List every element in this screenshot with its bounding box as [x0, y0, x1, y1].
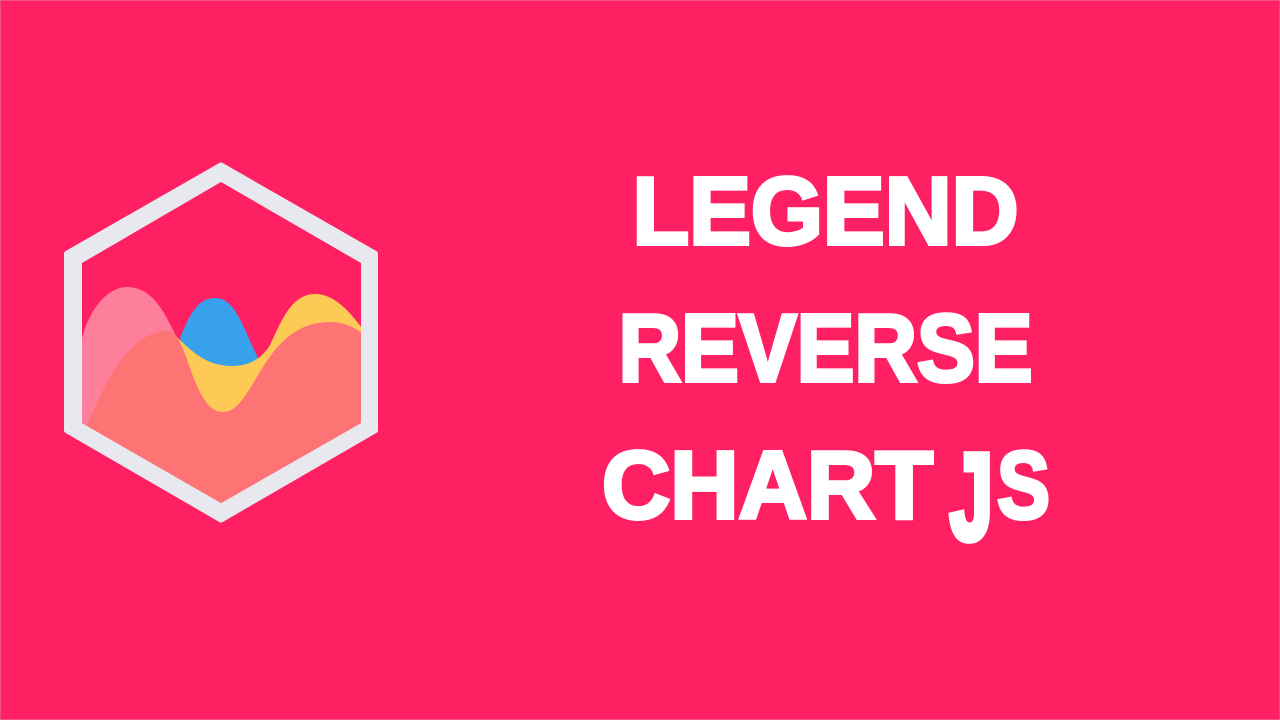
title line: LEGEND: LEGEND	[632, 158, 1018, 265]
blue area	[180, 298, 258, 366]
title line: CHART JS	[602, 429, 1050, 565]
hexagon outline	[67, 166, 375, 520]
title line: CHART JS: J	[950, 429, 993, 565]
yellow area	[172, 294, 365, 420]
title line: CHART JS: S	[997, 432, 1050, 539]
hexagon interior	[82, 182, 361, 503]
title line: REVERSE: REVERSE	[618, 295, 1032, 402]
title line: CHART JS: CHART	[602, 432, 933, 539]
pink area	[82, 287, 176, 430]
logo: Chart.js hexagon	[67, 166, 375, 520]
salmon area	[80, 322, 365, 510]
